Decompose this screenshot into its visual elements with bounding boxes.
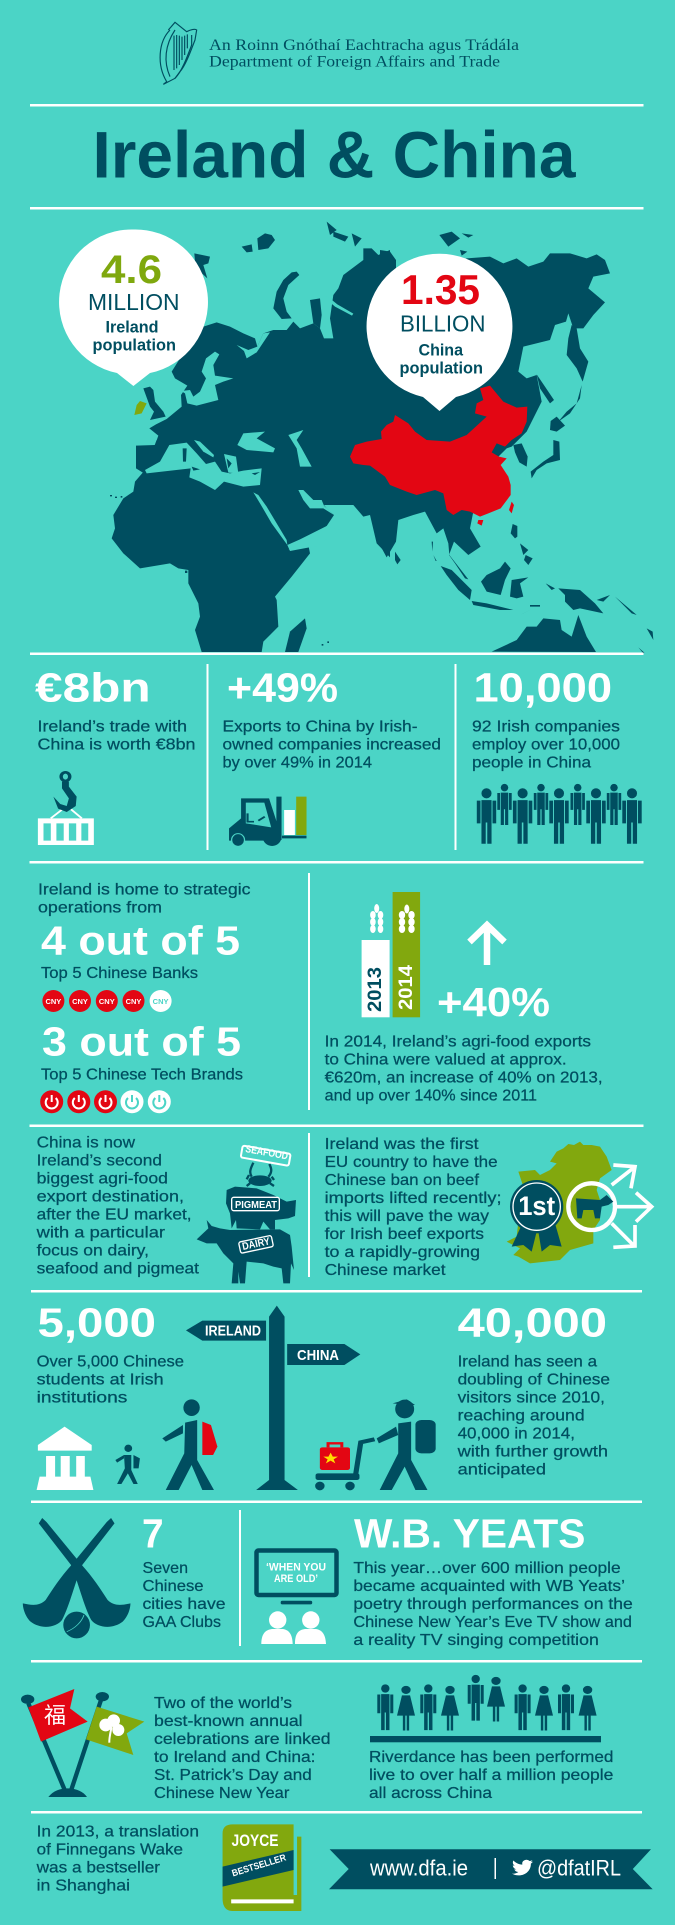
- icon: stacked cow, pig and crab: SEAFOOD: [244, 1143, 289, 1162]
- panel: second biggest agri-food destination: with a particular: [35, 1225, 166, 1242]
- chart: 2013 and 2014 bars: 2014: [396, 965, 417, 1010]
- panel: annual celebrations: St. Patrick’s Day and: [154, 1767, 312, 1784]
- banner: website and twitter: @dfatIRL: [537, 1856, 621, 1881]
- panel: strategic operations: operations from: [38, 900, 162, 916]
- panel: W.B. Yeats: This year…over 600 million people: [353, 1560, 621, 1577]
- panel: second biggest agri-food destination: focus on dairy,: [37, 1243, 149, 1260]
- icon: stacked cow, pig and crab: [197, 1143, 296, 1283]
- panel: Riverdance: all across China: [369, 1785, 492, 1802]
- banner: website and twitter: [329, 1849, 653, 1889]
- panel: GAA clubs: 7: [142, 1510, 164, 1556]
- callout: China population: [367, 254, 512, 411]
- callout: China population: 1.35: [401, 266, 480, 313]
- panel: strategic operations: 3 out of 5: [42, 1018, 241, 1064]
- panel: annual celebrations: celebrations are linked: [154, 1731, 331, 1748]
- panel: trade value: €8bn: [35, 664, 151, 710]
- panel: second biggest agri-food destination: Ireland’s second: [37, 1153, 162, 1170]
- panel: W.B. Yeats: became acquainted with WB Yeats’: [353, 1578, 625, 1595]
- panel: agri-food exports: [325, 892, 603, 1105]
- panel: visitors: visitors since 2010,: [458, 1389, 605, 1406]
- panel: GAA clubs: [23, 1510, 226, 1638]
- panel: agri-food exports: to China were valued at approx.: [325, 1052, 567, 1069]
- icon: crossed hurleys and sliotar: [23, 1518, 130, 1638]
- panel: Finnegans Wake: [36, 1824, 301, 1911]
- icon: television and viewers: [256, 1550, 336, 1644]
- panel: Finnegans Wake: of Finnegans Wake: [37, 1842, 183, 1859]
- icon: Irish harp emblem: [160, 22, 197, 84]
- icon: five currency coins: CNY: [72, 997, 88, 1006]
- panel: strategic operations: Top 5 Chinese Banks: [41, 965, 198, 982]
- icon: stacked cow, pig and crab: DAIRY: [241, 1235, 271, 1253]
- panel: second biggest agri-food destination: biggest agri-food: [37, 1171, 168, 1188]
- icon: row of employees: [477, 784, 642, 844]
- panel: students: [37, 1300, 217, 1490]
- panel: second biggest agri-food destination: after the EU market,: [37, 1207, 192, 1224]
- panel: visitors: 40,000: [458, 1300, 607, 1346]
- panel: Irish companies employ: employ over 10,000: [472, 736, 620, 754]
- panel: Riverdance: [369, 1675, 614, 1802]
- panel: Irish companies employ: people in China: [472, 754, 591, 772]
- icon: five currency coins: CNY: [45, 997, 61, 1006]
- panel: beef ban lifted: [325, 1136, 652, 1279]
- panel: annual celebrations: [21, 1689, 331, 1802]
- panel: Irish companies employ: 10,000: [474, 664, 612, 710]
- panel: Finnegans Wake: In 2013, a translation: [37, 1824, 199, 1841]
- panel: visitors: doubling of Chinese: [458, 1371, 610, 1388]
- panel: Finnegans Wake: was a bestseller: [36, 1860, 161, 1877]
- panel: second biggest agri-food destination: export destination,: [37, 1189, 184, 1206]
- panel: W.B. Yeats: poetry through performances on the: [353, 1596, 633, 1613]
- panel: W.B. Yeats: W.B. YEATS: [354, 1510, 585, 1556]
- panel: visitors: Ireland has seen a: [458, 1353, 597, 1370]
- panel: students: Over 5,000 Chinese: [37, 1353, 184, 1370]
- chart: 2013 and 2014 bars: 2013: [365, 967, 386, 1012]
- icon: signpost Ireland and China: [186, 1306, 360, 1490]
- title: Ireland & China: [92, 118, 577, 192]
- icon: Ireland map with medal, magnifier and arrows: [507, 1142, 652, 1263]
- icon: tourist with luggage cart: [315, 1399, 436, 1490]
- panel: exports growth: +49%: [227, 664, 338, 710]
- icon: forklift: [229, 797, 307, 846]
- panel: GAA clubs: GAA Clubs: [142, 1614, 221, 1631]
- panel: exports growth: [222, 664, 441, 846]
- panel: visitors: with further growth: [456, 1443, 608, 1460]
- panel: annual celebrations: best-known annual: [154, 1713, 303, 1730]
- callout: Ireland population: Ireland: [106, 318, 158, 336]
- panel: second biggest agri-food destination: China is now: [37, 1135, 135, 1152]
- panel: exports growth: Exports to China by Irish-: [222, 718, 418, 736]
- panel: strategic operations: Ireland is home to strategic: [38, 882, 251, 898]
- panel: beef ban lifted: this will pave the way: [325, 1208, 489, 1225]
- icon: five power buttons: [40, 1090, 171, 1113]
- panel: annual celebrations: Two of the world’s: [154, 1695, 292, 1712]
- icon: five currency coins: [42, 990, 172, 1012]
- icon: twitter bird: [512, 1860, 533, 1875]
- panel: strategic operations: [38, 882, 251, 1113]
- panel: trade value: China is worth €8bn: [38, 736, 196, 754]
- panel: students: students at Irish: [37, 1371, 164, 1388]
- icon: Joyce bestseller book: BESTSELLER: [231, 1852, 288, 1879]
- icon: five currency coins: CNY: [99, 997, 115, 1006]
- panel: beef ban lifted: Chinese market: [325, 1262, 446, 1279]
- panel: students: 5,000: [38, 1300, 156, 1346]
- panel: Irish companies employ: 92 Irish companies: [472, 718, 620, 736]
- panel: agri-food exports: and up over 140% since 2011: [325, 1088, 537, 1105]
- banner: website and twitter: www.dfa.ie: [369, 1856, 468, 1881]
- panel: GAA clubs: Seven: [142, 1560, 188, 1577]
- panel: strategic operations: 4 out of 5: [41, 918, 240, 964]
- panel: W.B. Yeats: Chinese New Year’s Eve TV show and: [353, 1614, 632, 1631]
- icon: crossed flags: [21, 1689, 144, 1797]
- header: department name: An Roinn Gnóthaí Eachtracha agus Trádála: [209, 37, 519, 54]
- panel: W.B. Yeats: a reality TV singing competition: [353, 1632, 599, 1649]
- world map: [110, 222, 653, 653]
- panel: agri-food exports: +40%: [437, 979, 550, 1025]
- panel: beef ban lifted: Ireland was the first: [325, 1136, 479, 1153]
- callout: Ireland population: [59, 229, 208, 386]
- icon: television and viewers: ‘WHEN YOU: [266, 1562, 326, 1574]
- panel: agri-food exports: €620m, an increase of 40% on 2013,: [325, 1070, 603, 1087]
- panel: trade value: Ireland’s trade with: [38, 718, 187, 736]
- panel: annual celebrations: Chinese New Year: [154, 1785, 290, 1802]
- panel: beef ban lifted: to a rapidly-growing: [325, 1244, 480, 1261]
- panel: trade value: [35, 664, 196, 845]
- panel: exports growth: owned companies increased: [222, 736, 441, 754]
- panel: second biggest agri-food destination: [35, 1135, 296, 1283]
- header: department name: [209, 37, 519, 70]
- icon: stacked cow, pig and crab: PIGMEAT: [235, 1199, 278, 1211]
- icon: Joyce bestseller book: JOYCE: [232, 1831, 278, 1850]
- panel: GAA clubs: Chinese: [142, 1578, 204, 1595]
- panel: beef ban lifted: Chinese ban on beef: [325, 1172, 480, 1189]
- panel: strategic operations: Top 5 Chinese Tech Brands: [41, 1066, 243, 1084]
- icon: large walking student with red backpack: [162, 1399, 217, 1490]
- icon: crane hook and container: [38, 772, 94, 845]
- panel: Riverdance: Riverdance has been performed: [369, 1749, 613, 1766]
- panel: visitors: [315, 1300, 610, 1490]
- chart: 2013 and 2014 bars: [362, 892, 420, 1017]
- panel: W.B. Yeats: [256, 1510, 633, 1649]
- icon: small walking student: [115, 1445, 140, 1484]
- icon: crossed flags: 福: [44, 1703, 66, 1728]
- panel: beef ban lifted: EU country to have the: [325, 1154, 498, 1171]
- panel: beef ban lifted: imports lifted recently;: [325, 1190, 502, 1207]
- icon: university building: [37, 1427, 93, 1490]
- panel: GAA clubs: cities have: [142, 1596, 226, 1613]
- callout: China population: BILLION: [400, 310, 486, 336]
- icon: Joyce bestseller book: [223, 1824, 301, 1911]
- icon: signpost Ireland and China: IRELAND: [205, 1322, 261, 1339]
- panel: Finnegans Wake: in Shanghai: [37, 1878, 130, 1895]
- icon: five currency coins: CNY: [126, 997, 141, 1006]
- panel: visitors: anticipated: [458, 1461, 546, 1478]
- icon: signpost Ireland and China: CHINA: [297, 1347, 339, 1364]
- icon: Ireland map with medal, magnifier and arrows: 1st: [518, 1191, 555, 1221]
- callout: Ireland population: MILLION: [88, 289, 180, 315]
- callout: Ireland population: population: [92, 336, 176, 354]
- header: department name: Department of Foreign Affairs and Trade: [209, 54, 500, 70]
- panel: students: institutions: [37, 1389, 127, 1406]
- icon: five currency coins: CNY: [153, 997, 169, 1006]
- panel: Riverdance: live to over half a million people: [369, 1767, 614, 1784]
- panel: exports growth: by over 49% in 2014: [222, 754, 372, 772]
- callout: China population: population: [400, 360, 483, 378]
- icon: television and viewers: ARE OLD’: [274, 1573, 318, 1585]
- icon: up arrow: [470, 925, 504, 965]
- panel: beef ban lifted: for Irish beef exports: [325, 1226, 484, 1243]
- panel: agri-food exports: In 2014, Ireland’s agri-food exports: [325, 1034, 591, 1051]
- panel: annual celebrations: to Ireland and China:: [154, 1749, 316, 1766]
- panel: second biggest agri-food destination: seafood and pigmeat: [37, 1261, 200, 1278]
- panel: visitors: 40,000 in 2014,: [458, 1425, 575, 1442]
- panel: visitors: reaching around: [458, 1407, 585, 1424]
- callout: Ireland population: 4.6: [101, 248, 162, 292]
- icon: dancers on a stage: [370, 1675, 601, 1742]
- panel: Irish companies employ: [472, 664, 642, 844]
- callout: China population: China: [418, 342, 464, 360]
